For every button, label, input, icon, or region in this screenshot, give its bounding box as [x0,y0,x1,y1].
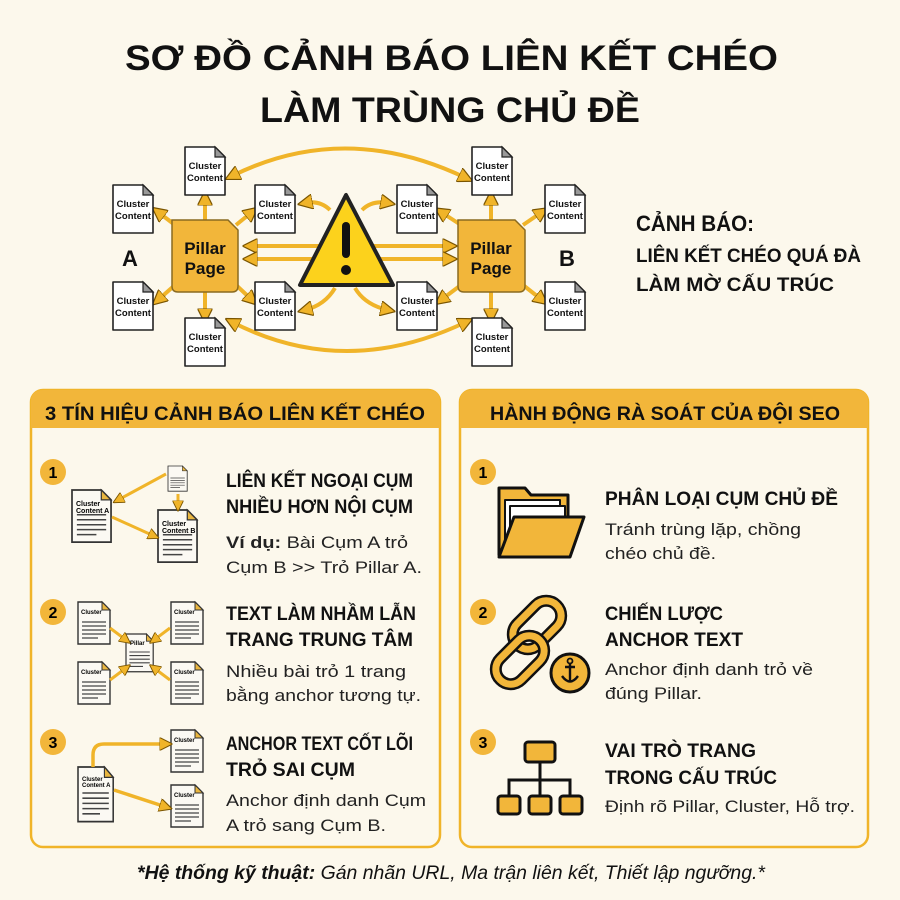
pillar B: Page [471,259,511,278]
item 3: Content A [82,783,111,789]
diagram: pillar clusters: Cluster [549,199,582,210]
item 2: bằng anchor tương tự. [226,686,421,705]
diagram: pillar clusters: Content [187,344,224,355]
diagram: pillar clusters: Content [474,173,511,184]
action 3: 3 [479,735,488,752]
item 1 [40,459,422,577]
diagram: pillar clusters: A [122,246,138,271]
action 2: 2 [479,605,488,622]
item 3: Cluster [174,738,195,744]
item 1: Content B [162,528,195,535]
panel: warning signals [31,390,440,847]
item 1: Ví dụ: Bài Cụm A trỏ [226,533,408,552]
item 3 [40,729,426,835]
item 1: NHIỀU HƠN NỘI CỤM [226,496,413,518]
heading: actions: HÀNH ĐỘNG RÀ SOÁT CỦA ĐỘI SEO [490,403,840,425]
item 2: TRANG TRUNG TÂM [226,629,413,651]
warning callout: LIÊN KẾT CHÉO QUÁ ĐÀ [636,245,861,267]
diagram: pillar clusters: Content [187,173,224,184]
item 2: Pillar [130,641,145,647]
action 1 [470,459,838,563]
diagram: pillar clusters: Content [547,211,584,222]
item 2 [40,599,421,705]
item 3: Anchor định danh Cụm [226,791,426,810]
panel: SEO actions [460,390,868,847]
warning callout [636,211,861,296]
item 1: Cluster [162,521,186,528]
diagram: pillar clusters: Content [115,211,152,222]
title: LÀM TRÙNG CHỦ ĐỀ [260,90,640,130]
diagram: pillar clusters: Content [474,344,511,355]
item 2: Cluster [81,610,102,616]
diagram: pillar clusters: Cluster [117,199,150,210]
warning callout: LÀM MỜ CẤU TRÚC [636,274,834,296]
action 2 [470,595,813,703]
action 1: PHÂN LOẠI CỤM CHỦ ĐỀ [605,488,838,510]
item 1: Content A [76,508,109,515]
action 3: Định rõ Pillar, Cluster, Hỗ trợ. [605,797,855,816]
item 2: Cluster [174,670,195,676]
diagram: pillar clusters: Cluster [189,332,222,343]
pillar A [172,220,238,292]
diagram: pillar clusters: Content [547,308,584,319]
action 1: Tránh trùng lặp, chồng [605,520,801,539]
action 1: chéo chủ đề. [605,544,716,563]
item 2: 2 [49,605,58,622]
heading: signals: 3 TÍN HIỆU CẢNH BÁO LIÊN KẾT CHÉO [45,403,425,425]
warning callout: CẢNH BÁO: [636,211,754,236]
item 2: TEXT LÀM NHẦM LẪN [226,603,416,625]
diagram: pillar clusters: Content [399,211,436,222]
diagram: pillar clusters: Cluster [476,161,509,172]
item 2: Cluster [174,610,195,616]
diagram: pillar clusters: Cluster [259,199,292,210]
diagram: pillar clusters: Cluster [259,296,292,307]
action 1: 1 [479,465,488,482]
item 3: Cluster [82,777,103,783]
pillar A: Page [185,259,225,278]
item 3: 3 [49,735,58,752]
diagram: pillar clusters: Cluster [549,296,582,307]
item 1: 1 [49,465,58,482]
title [125,38,778,130]
diagram: pillar clusters: Content [115,308,152,319]
action 3: TRONG CẤU TRÚC [605,767,777,789]
footer note: *Hệ thống kỹ thuật: Gán nhãn URL, Ma trận liên kết, Thiết lập ngưỡng.* [137,863,766,884]
item 1: LIÊN KẾT NGOẠI CỤM [226,470,413,492]
item 3: ANCHOR TEXT CỐT LÕI [226,733,413,755]
diagram: pillar clusters: Cluster [476,332,509,343]
action 2: Anchor định danh trỏ về [605,660,813,679]
item 3: A trỏ sang Cụm B. [226,816,386,835]
item 2: Nhiều bài trỏ 1 trang [226,662,406,681]
pillar B [458,220,525,292]
icon: hierarchy [498,742,582,814]
diagram: pillar clusters: Content [257,308,294,319]
item 3: TRỎ SAI CỤM [226,759,355,781]
action 2: đúng Pillar. [605,684,702,703]
diagram: pillar clusters: B [559,246,575,271]
item 3: Cluster [174,793,195,799]
action 2: CHIẾN LƯỢC [605,603,723,625]
diagram: pillar clusters: Cluster [189,161,222,172]
action 2: ANCHOR TEXT [605,630,743,651]
item 2: Cluster [81,670,102,676]
diagram: pillar clusters: Cluster [117,296,150,307]
diagram: pillar clusters [113,147,585,366]
icon: warning triangle [300,195,393,285]
diagram: pillar clusters: Content [399,308,436,319]
title: SƠ ĐỒ CẢNH BÁO LIÊN KẾT CHÉO [125,38,778,78]
diagram: pillar clusters: Cluster [401,296,434,307]
item 1: Cluster [76,501,100,508]
action 3: VAI TRÒ TRANG [605,740,756,762]
diagram: pillar clusters: Cluster [401,199,434,210]
pillar A: Pillar [184,239,226,258]
diagram: pillar clusters: Content [257,211,294,222]
icon: link anchor [490,595,589,692]
item 1: Cụm B >> Trỏ Pillar A. [226,558,422,577]
icon: folder [499,488,584,557]
pillar B: Pillar [470,239,512,258]
action 3 [470,729,855,816]
